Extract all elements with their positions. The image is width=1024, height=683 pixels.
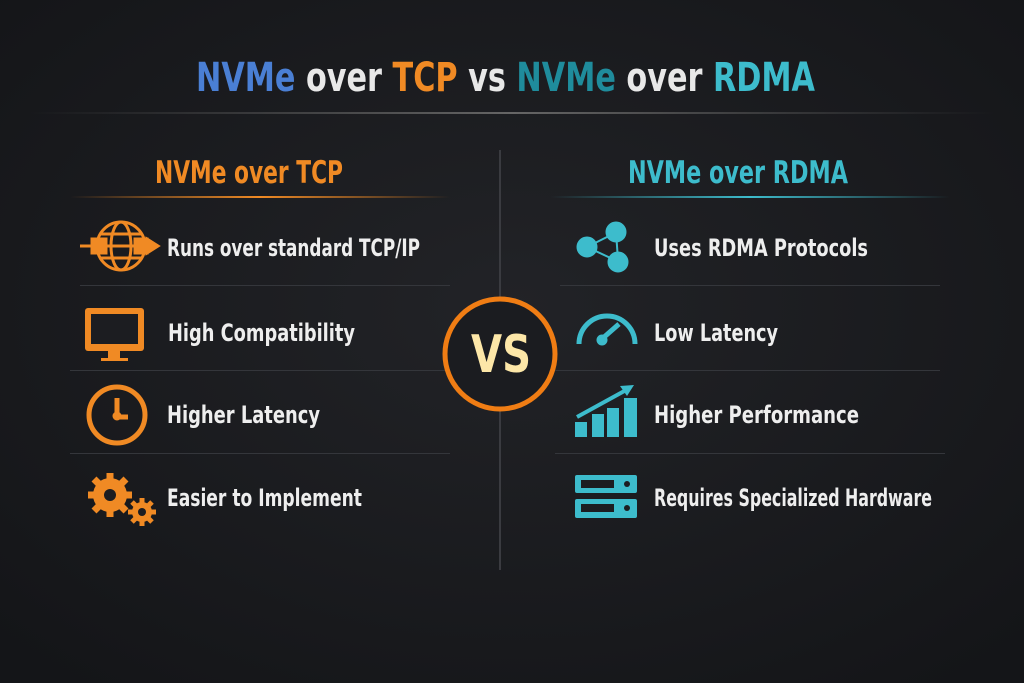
panel: NVMe over RDMA <box>550 155 950 518</box>
title: NVMe over TCP vs NVMe over RDMA <box>196 55 815 101</box>
text: high compatibility: High Compatibility <box>168 319 355 347</box>
heading: RDMA: NVMe over RDMA <box>628 155 848 191</box>
text: requires specialized hardware: Requires Specialized Hardware <box>654 484 932 512</box>
text: higher latency: Higher Latency <box>167 401 320 429</box>
heading: TCP: NVMe over TCP <box>155 155 343 191</box>
text: low latency: Low Latency <box>654 319 778 347</box>
icon: bar chart with arrow <box>575 385 637 437</box>
icon: globe with arrows <box>80 222 158 270</box>
text: runs over TCP/IP: Runs over standard TCP/IP <box>167 234 420 262</box>
icon: gauge <box>579 316 635 345</box>
icon: VS circle <box>445 299 555 409</box>
text: uses RDMA protocols: Uses RDMA Protocols <box>654 234 868 262</box>
text: higher performance: Higher Performance <box>654 401 859 429</box>
text: easier to implement: Easier to Implement <box>167 484 362 512</box>
panel: NVMe over TCP <box>70 155 450 526</box>
icon: VS circle: VS <box>471 325 531 385</box>
icon: gears <box>88 473 156 526</box>
icon: monitor <box>85 308 144 361</box>
icon: clock <box>89 387 145 443</box>
icon: server <box>575 475 637 518</box>
icon: network nodes <box>577 222 628 272</box>
